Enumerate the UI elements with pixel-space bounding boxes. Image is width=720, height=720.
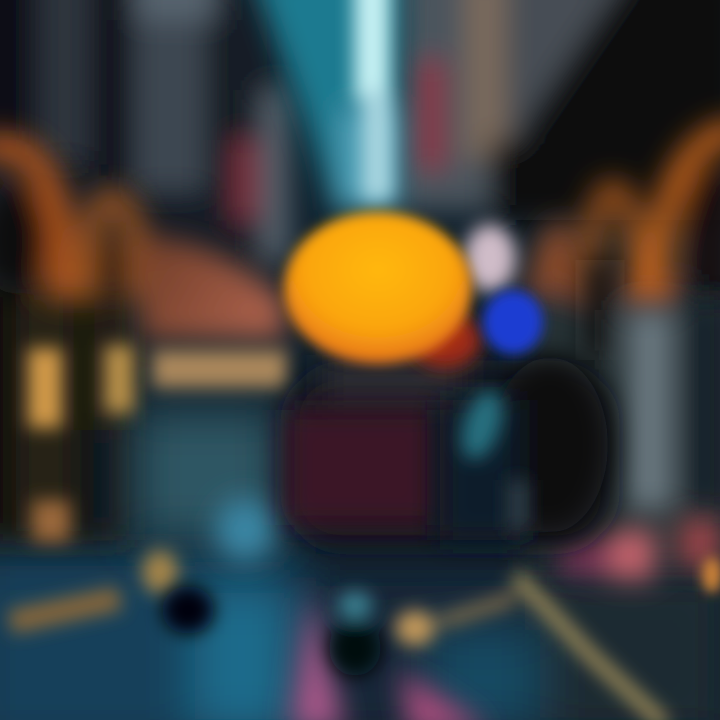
white-pink blob xyxy=(464,224,516,292)
vehicle: dark right section xyxy=(440,357,608,540)
vehicle: upper shadow xyxy=(325,355,465,405)
street floor xyxy=(0,550,720,720)
dark objects on street xyxy=(162,586,381,676)
orange glint at right edge xyxy=(702,557,720,593)
road markings xyxy=(10,550,665,720)
left arcade: yellow lights xyxy=(28,345,287,542)
buildings: upper left xyxy=(0,0,290,270)
light beam: bright core xyxy=(354,0,392,200)
right arcade xyxy=(520,130,720,560)
left arcade: orange arches xyxy=(0,147,285,340)
left arcade: light patch on street xyxy=(215,498,275,562)
left arcade: base and pillars xyxy=(0,280,130,540)
vehicle: overall shadow mass xyxy=(290,370,610,545)
buildings: upper right xyxy=(400,0,720,220)
vehicle xyxy=(285,355,610,545)
pink reflections xyxy=(290,518,720,720)
right arcade: pillars xyxy=(585,260,720,510)
orange ball xyxy=(284,212,472,364)
left arcade: teal mid-street xyxy=(135,410,280,540)
orange ball shadow xyxy=(409,312,481,368)
vehicle: maroon left section xyxy=(285,410,435,525)
vehicle: teal highlight xyxy=(454,385,528,530)
blue ball xyxy=(483,290,543,354)
light beam: teal sky xyxy=(250,0,400,215)
